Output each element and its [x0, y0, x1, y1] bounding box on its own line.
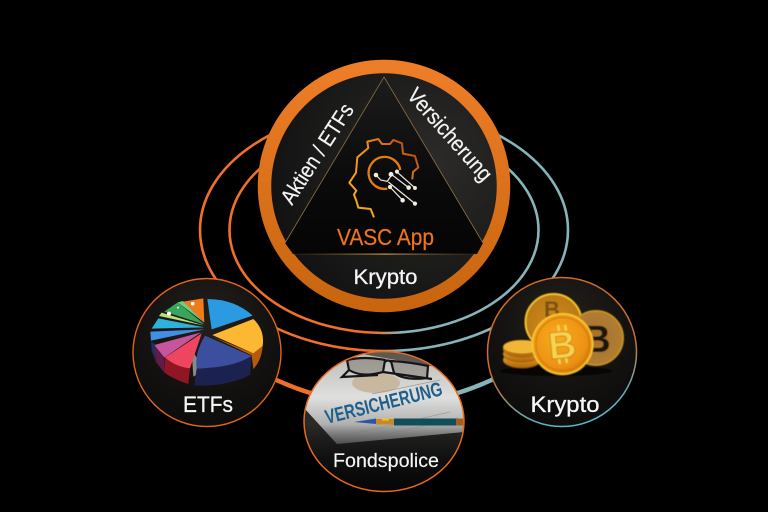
label: Versicherung: Versicherung	[402, 83, 498, 186]
panel: ETFs	[133, 278, 281, 426]
label: Aktien / ETFs: Aktien / ETFs	[275, 99, 359, 209]
outline	[304, 352, 464, 492]
panel: Krypto	[488, 278, 636, 426]
label: Krypto: Krypto	[354, 266, 418, 289]
icon: glasses	[342, 358, 432, 379]
disc	[488, 278, 636, 426]
icon: pen	[354, 418, 464, 426]
back coin right	[569, 311, 623, 365]
icon: AI head with gear and circuits	[349, 139, 418, 217]
front coin	[532, 314, 592, 374]
hub ring	[264, 66, 504, 306]
disc	[133, 278, 281, 426]
document photo	[304, 351, 464, 492]
document heading: VERSICHERUNG	[323, 378, 445, 429]
back coin left	[526, 294, 582, 350]
label: Krypto: Krypto	[530, 392, 600, 417]
icon: bitcoin coins	[500, 294, 623, 376]
coin stack	[503, 340, 541, 368]
orbit rings	[200, 109, 568, 404]
icon: bitcoin coins: B	[546, 324, 578, 368]
label: Fondspolice: Fondspolice	[333, 450, 439, 472]
pie chart	[150, 298, 263, 386]
label: VASC App: VASC App	[337, 224, 434, 250]
central hub: VASC App	[264, 66, 504, 306]
band divider	[293, 254, 477, 255]
icon: bitcoin coins: B	[583, 319, 611, 361]
triangle	[285, 77, 483, 254]
panel: Fondspolice	[304, 351, 464, 492]
label: ETFs: ETFs	[183, 392, 233, 417]
icon: bitcoin coins: B	[544, 297, 560, 322]
